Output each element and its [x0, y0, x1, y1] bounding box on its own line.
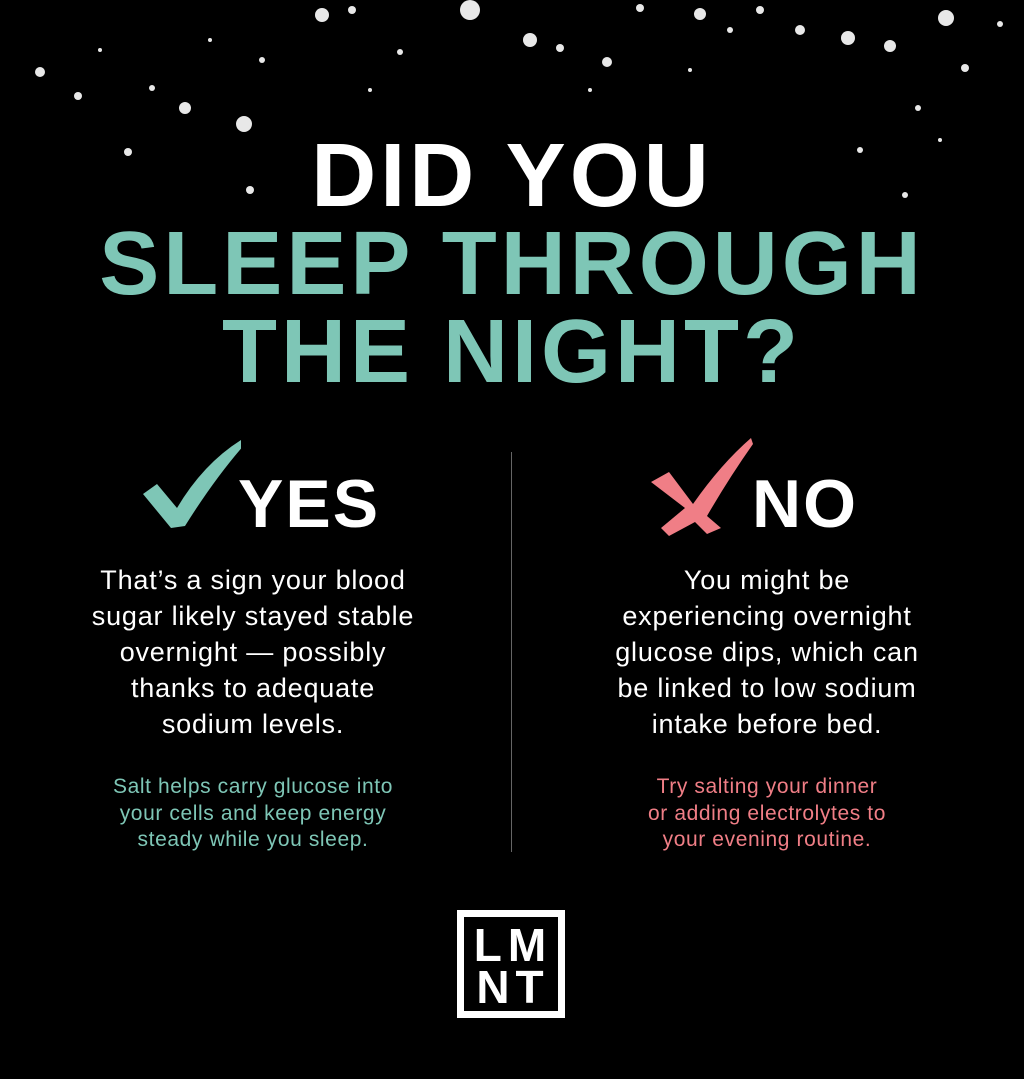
panel: yes [92, 440, 414, 851]
text block: yes: That’s a sign your blood [100, 565, 406, 595]
panel: no [615, 438, 919, 851]
title [99, 126, 925, 402]
icon: check mark [143, 440, 241, 528]
logo: LM [474, 919, 552, 971]
heading: no: NO [752, 466, 858, 542]
text block: yes [92, 565, 414, 851]
title: SLEEP THROUGH [99, 214, 925, 314]
title: DID YOU [311, 126, 713, 226]
text block: no: You might be [684, 565, 850, 595]
text block: yes: overnight — possibly [120, 637, 386, 667]
title: THE NIGHT? [222, 302, 802, 402]
text block: yes: Salt helps carry glucose into [113, 775, 393, 798]
text block: no: or adding electrolytes to [648, 802, 886, 824]
text block: yes: sodium levels. [162, 709, 344, 739]
text block: no: be linked to low sodium [617, 673, 917, 703]
text block: no: experiencing overnight [622, 601, 912, 631]
icon: x mark [651, 438, 753, 536]
text block: yes: thanks to adequate [131, 673, 375, 703]
logo [457, 910, 565, 1018]
text block: no: Try salting your dinner [657, 775, 877, 798]
text block: yes: your cells and keep energy [120, 802, 386, 824]
salt particles [35, 0, 1003, 198]
text block: no: intake before bed. [652, 709, 882, 739]
text block: no: your evening routine. [663, 828, 871, 851]
text block: yes: steady while you sleep. [138, 828, 368, 851]
heading: yes: YES [238, 466, 380, 542]
divider [511, 452, 512, 852]
logo: NT [476, 961, 550, 1013]
text block: no [615, 565, 919, 851]
text block: no: glucose dips, which can [615, 637, 919, 667]
text block: yes: sugar likely stayed stable [92, 601, 414, 631]
